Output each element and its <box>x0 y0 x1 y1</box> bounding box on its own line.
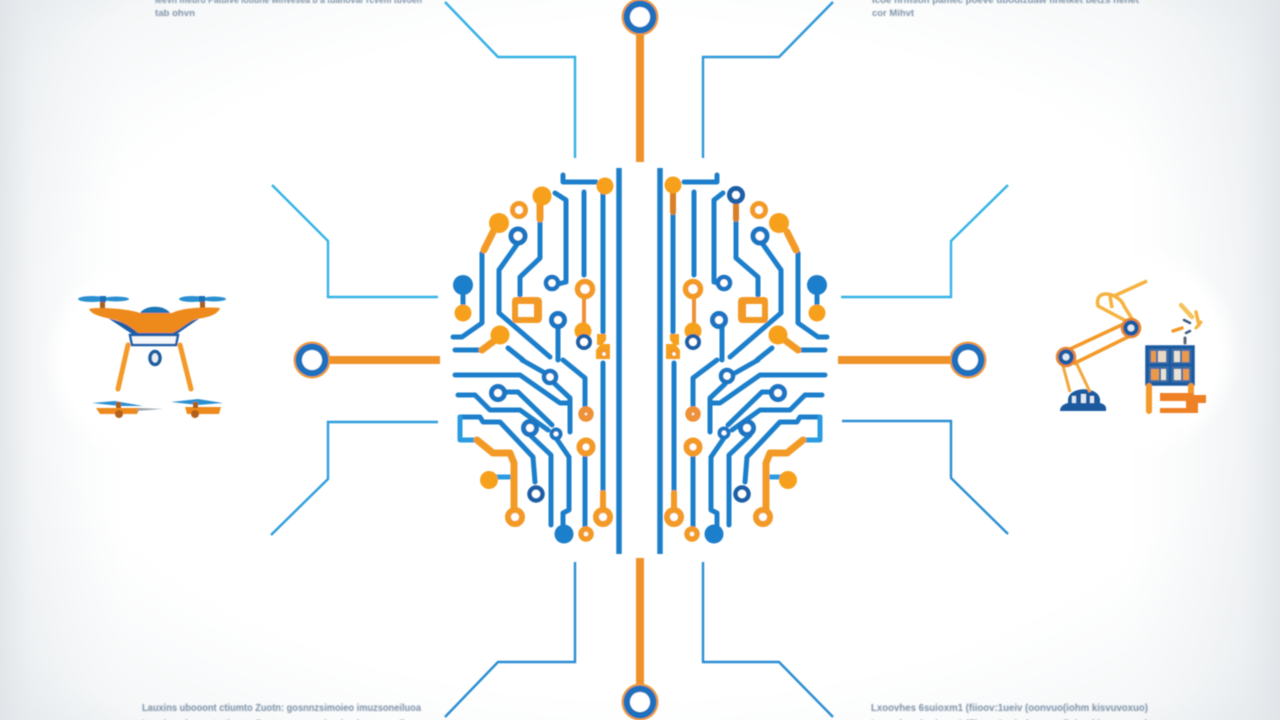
connector: left orange node <box>294 342 440 378</box>
icon: robot arm and shelf <box>1057 281 1206 413</box>
text block: top left caption: tab ohvn <box>155 8 195 19</box>
shelf unit <box>1147 347 1193 384</box>
scattered parts above shelf <box>1173 305 1201 343</box>
robot arm lower link <box>1062 358 1090 392</box>
drone small rotors lower left <box>92 401 163 418</box>
brain: right circuit hemisphere <box>660 168 827 554</box>
drone lower body <box>108 318 200 336</box>
connector: right orange node <box>838 342 986 378</box>
drone dome <box>139 307 171 315</box>
drone camera <box>150 352 160 364</box>
text block: top left caption <box>155 0 422 19</box>
icon: drone <box>78 296 226 418</box>
robot arm joints <box>1057 319 1140 366</box>
brain: left circuit hemisphere <box>453 168 619 554</box>
connector: bottom orange node <box>622 558 658 720</box>
drone small rotors lower right <box>171 399 223 418</box>
panel: left icon disc <box>42 248 262 468</box>
text block: bottom right caption: Lxoovhes 6suioxm1 (fiioov:1ueiv (oonvuo(iohm kisvuvoxuo) <box>871 703 1148 714</box>
orange conveyor box <box>1160 393 1206 413</box>
text block: top right caption: cor Mihvt <box>872 8 915 19</box>
drone body and arms <box>89 308 220 333</box>
drone propellers <box>78 296 226 309</box>
drone landing legs <box>118 345 191 389</box>
connector: top orange node <box>622 0 658 162</box>
text block: bottom left caption <box>142 703 421 720</box>
shelf legs and orange parts <box>1149 386 1191 411</box>
panel: right icon disc <box>1022 242 1242 462</box>
robot arm base <box>1060 389 1106 411</box>
text block: bottom right caption <box>871 703 1148 720</box>
robot arm upper link <box>1068 322 1134 364</box>
robot arm forearm <box>1097 294 1134 322</box>
drone white band <box>130 335 178 345</box>
robot arm gripper <box>1114 281 1147 296</box>
text block: top right caption <box>872 0 1140 19</box>
connector lines: thin blue brackets <box>271 2 1008 717</box>
text block: bottom left caption: Lauxins ubooont ctiumto Zuotn: gosnnzsimoieo imuzsoneiluoa <box>142 703 421 714</box>
